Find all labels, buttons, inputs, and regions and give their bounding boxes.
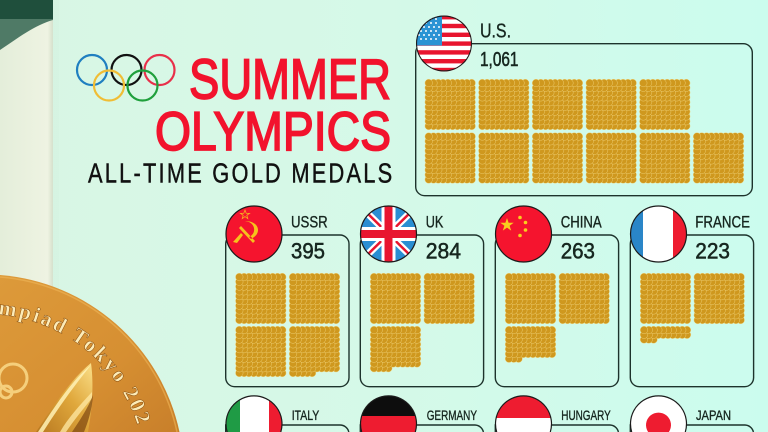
medal blocks: U.S. bbox=[425, 79, 744, 183]
medal rings bbox=[0, 364, 27, 398]
flag: France bbox=[630, 205, 688, 263]
title: SUMMER bbox=[189, 48, 391, 112]
flag: USSR bbox=[226, 206, 282, 262]
medal torch tip bbox=[36, 363, 92, 432]
flag: Italy bbox=[226, 396, 282, 432]
label: China: CHINA bbox=[561, 212, 602, 231]
label: Germany: GERMANY bbox=[427, 408, 477, 423]
flag: U.S. bbox=[415, 15, 473, 73]
olympic rings bbox=[77, 55, 174, 100]
subtitle: ALL-TIME GOLD MEDALS bbox=[88, 158, 392, 189]
label: Hungary: HUNGARY bbox=[561, 408, 611, 423]
flag: China bbox=[496, 206, 552, 262]
panel: USSR bbox=[226, 206, 349, 387]
panel: China bbox=[495, 206, 619, 387]
value: 395: 395 bbox=[291, 238, 325, 263]
label: France: FRANCE bbox=[695, 212, 750, 231]
flag: Germany bbox=[360, 396, 416, 432]
panel: UK bbox=[360, 205, 484, 387]
medal blocks: USSR bbox=[236, 273, 340, 377]
panel: France bbox=[630, 205, 754, 387]
panel: U.S. bbox=[415, 15, 752, 196]
label: Japan: JAPAN bbox=[696, 408, 731, 423]
label: U.S.: U.S. bbox=[480, 20, 511, 42]
panel: Germany bbox=[360, 396, 483, 432]
title bbox=[88, 48, 392, 189]
label: UK: UK bbox=[426, 212, 444, 231]
medal blocks: France bbox=[640, 273, 744, 343]
value: 223: 223 bbox=[695, 238, 730, 263]
label: Italy: ITALY bbox=[292, 408, 319, 423]
gold medal bbox=[0, 275, 180, 432]
flag: Japan bbox=[630, 396, 686, 432]
flag: UK bbox=[360, 205, 417, 263]
value: 284: 284 bbox=[426, 238, 461, 263]
label: USSR: USSR bbox=[291, 212, 328, 231]
title: OLYMPICS bbox=[155, 101, 391, 162]
medal blocks: China bbox=[505, 273, 610, 363]
medal blocks: UK bbox=[370, 273, 475, 372]
ribbon bbox=[0, 0, 59, 300]
panel: Italy bbox=[226, 396, 349, 432]
flag: Hungary bbox=[496, 396, 552, 432]
value: 263: 263 bbox=[561, 238, 595, 263]
panel: Hungary bbox=[495, 396, 618, 432]
panel: Japan bbox=[630, 396, 753, 432]
value: 1,061: 1,061 bbox=[480, 49, 518, 71]
